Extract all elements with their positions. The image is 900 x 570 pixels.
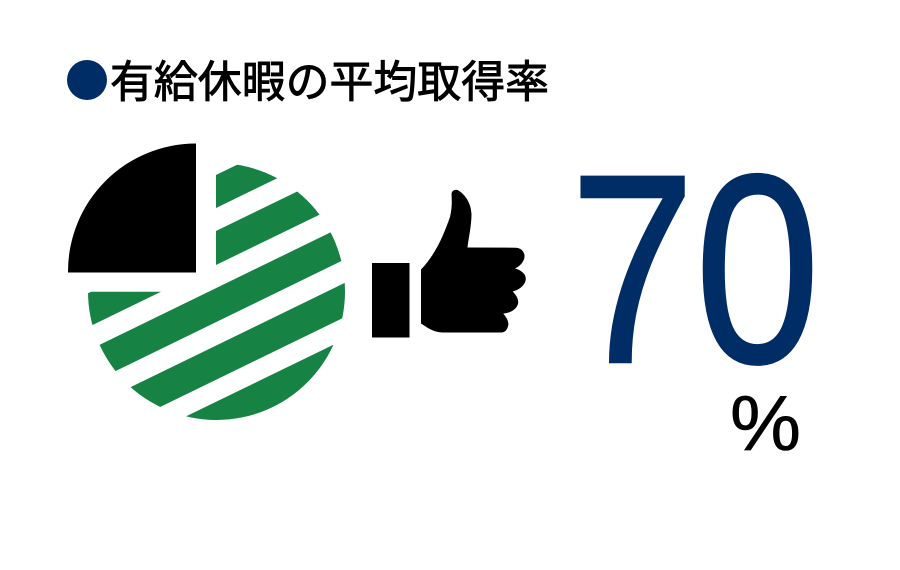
unit: percent sign: % xyxy=(730,379,801,467)
pie slice: black quarter xyxy=(68,143,196,272)
heading marker: navy dot xyxy=(67,60,107,100)
icon: thumbs up xyxy=(372,190,526,338)
chart: pie with 70% striped green and 30% black xyxy=(68,144,345,420)
title: 有給休暇の平均取得率 xyxy=(110,58,549,107)
big number: 70: 70 xyxy=(570,119,820,420)
pie slice: green striped remainder xyxy=(88,164,345,420)
infographic canvas xyxy=(67,59,812,451)
